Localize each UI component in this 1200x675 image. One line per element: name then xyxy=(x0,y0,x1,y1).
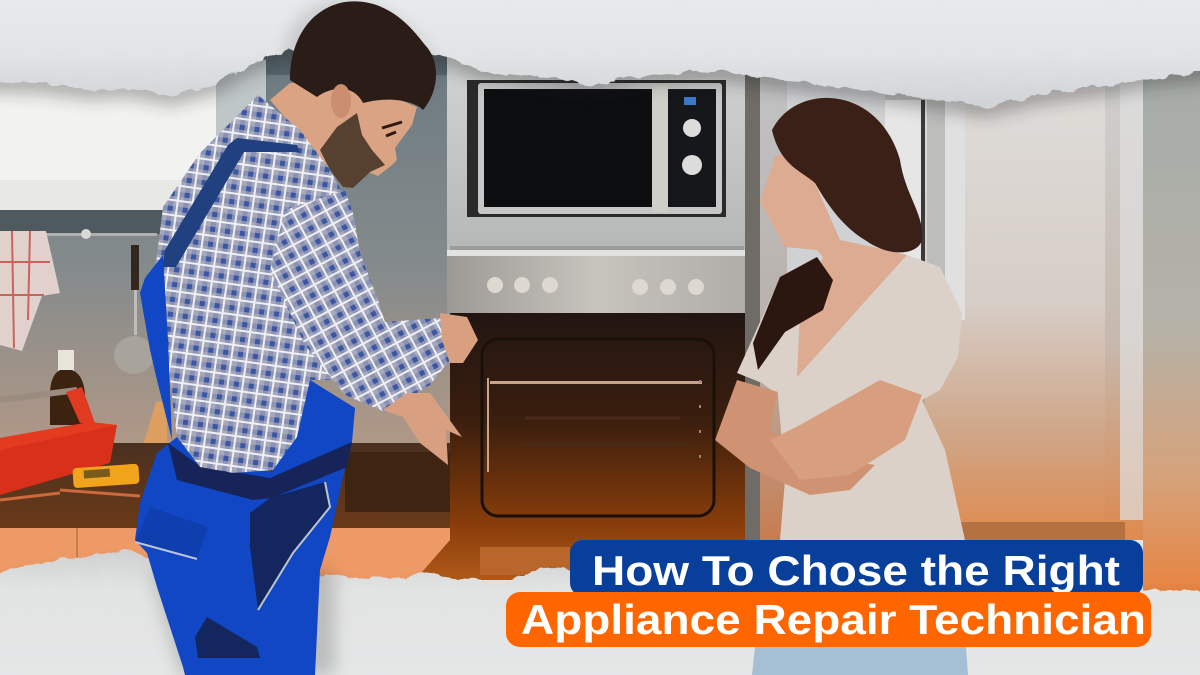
shirt body xyxy=(153,95,378,473)
overall strap and bib xyxy=(140,138,300,440)
face and neck xyxy=(760,150,907,377)
hair xyxy=(290,1,436,110)
hands xyxy=(440,313,478,363)
door xyxy=(478,83,722,214)
man: technician xyxy=(135,0,478,675)
cutting board xyxy=(138,400,167,462)
torn paper: bottom xyxy=(0,550,1200,675)
beard xyxy=(320,113,385,188)
controls xyxy=(668,89,716,207)
eye and brow xyxy=(382,122,402,136)
wall cabinet xyxy=(0,60,266,234)
waistband xyxy=(168,442,352,500)
oven control panel xyxy=(447,250,745,314)
title line 2: Appliance Repair Technician xyxy=(521,596,1146,643)
bottle xyxy=(50,350,85,425)
kitchen background xyxy=(0,0,460,600)
woman xyxy=(715,98,968,675)
counter xyxy=(0,443,450,530)
hair xyxy=(772,98,922,252)
built-in microwave xyxy=(447,50,745,250)
tea towel xyxy=(0,231,60,351)
red toolbox xyxy=(0,387,117,495)
hair lock xyxy=(753,257,833,370)
torn paper: top xyxy=(0,0,1200,118)
jeans xyxy=(752,647,968,675)
title line 1: How To Chose the Right xyxy=(592,547,1120,594)
multimeter xyxy=(72,464,140,488)
ear xyxy=(331,84,351,118)
orange cabinets xyxy=(0,528,450,583)
pocket flap xyxy=(135,507,208,558)
overalls lower xyxy=(135,380,355,675)
soft shadow of the man on the paper xyxy=(150,570,335,675)
utensil rail xyxy=(45,229,157,374)
lower pocket xyxy=(195,617,260,658)
top xyxy=(737,255,965,540)
neck and face xyxy=(270,80,417,188)
sleeve xyxy=(270,190,456,412)
fridge xyxy=(925,70,1143,540)
crossed arms xyxy=(715,380,875,495)
tall fridge unit xyxy=(745,70,926,550)
right wall xyxy=(1143,50,1200,600)
papers and wires xyxy=(0,490,140,500)
title xyxy=(506,540,1151,647)
open zip panel xyxy=(250,482,330,610)
oven xyxy=(415,313,745,580)
